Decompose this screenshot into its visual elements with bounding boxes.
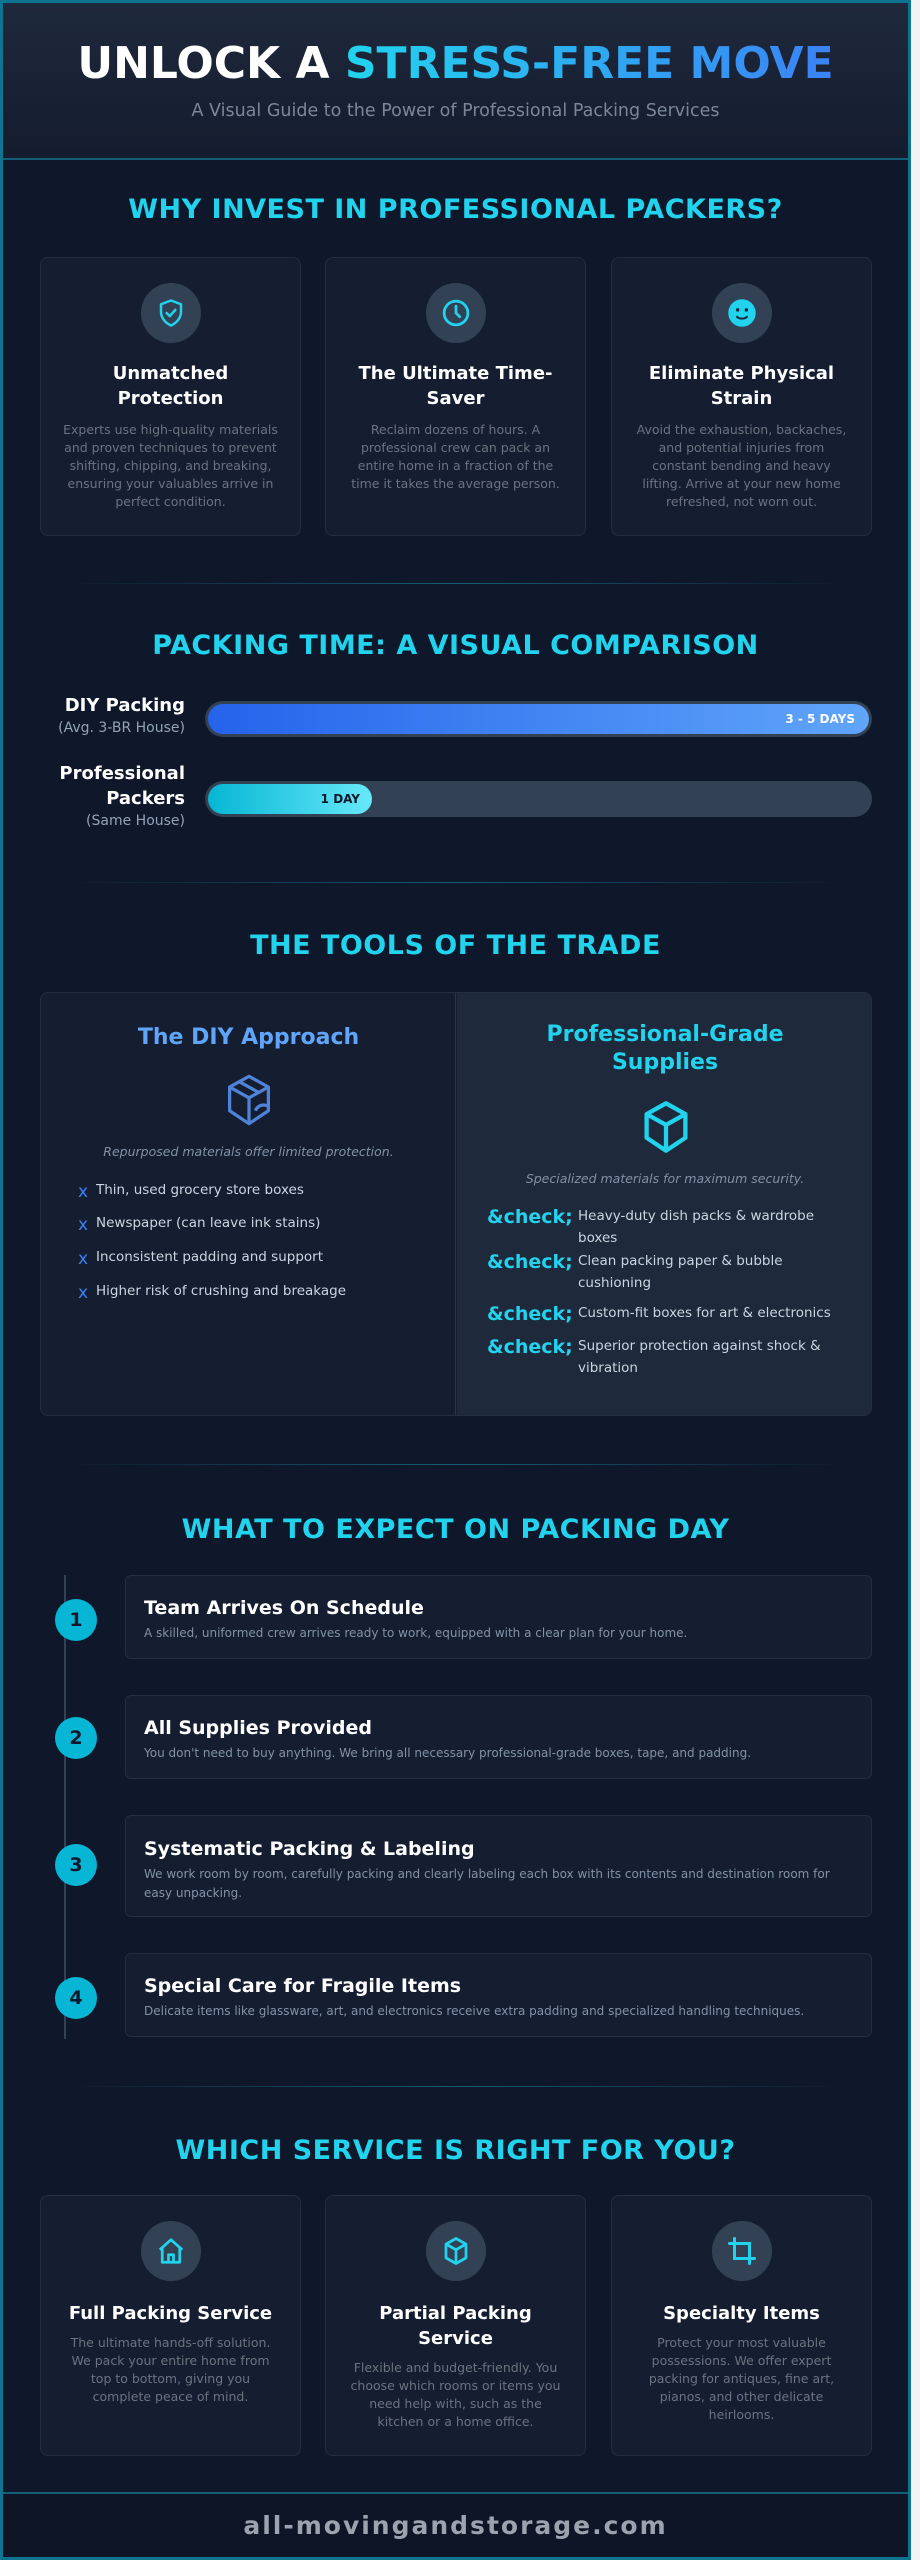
bar: professional (205, 781, 872, 817)
card: partial packing: Partial Packing Service (379, 2303, 532, 2349)
panel: DIY approach: Repurposed materials offer limited protection. (103, 1144, 394, 1159)
panel: DIY approach (41, 993, 456, 1417)
panel: professional supplies: &check; (487, 1206, 573, 1228)
bar: DIY (205, 701, 872, 737)
panel: professional supplies: Superior protection against shock & vibration (578, 1338, 821, 1376)
card: protection (40, 257, 301, 536)
panel: professional supplies: Clean packing paper & bubble cushioning (578, 1253, 783, 1291)
label: DIY (58, 695, 185, 736)
panel: professional supplies: Specialized materials for maximum security. (526, 1171, 804, 1186)
card: full packing (40, 2195, 301, 2456)
panel: professional supplies: Custom-fit boxes for art & electronics (578, 1305, 831, 1321)
icon: crop frame (712, 2221, 772, 2281)
timeline (64, 1575, 66, 2039)
step 1 (55, 1575, 872, 1659)
panel: DIY approach: x (78, 1249, 88, 1269)
card: full packing: Full Packing Service (69, 2303, 272, 2324)
card: time saver (325, 257, 586, 536)
panel: professional supplies: Heavy-duty dish packs & wardrobe boxes (578, 1208, 814, 1246)
card: strain: Avoid the exhaustion, backaches, and potential injuries from constant bending and heavy lifting. Arrive at your new home refreshed, not worn out. (637, 422, 846, 509)
card: protection: Experts use high-quality materials and proven techniques to prevent shifting, chipping, and breaking, ensuring your valuables arrive in perfect condition. (63, 422, 278, 509)
title: UNLOCK A STRESS-FREE MOVE (77, 38, 834, 89)
card: strain: Eliminate Physical Strain (649, 363, 834, 409)
panel: DIY approach: The DIY Approach (138, 1025, 359, 1050)
panel: DIY approach: x (78, 1283, 88, 1303)
panel: professional supplies: Professional-Grade (546, 1022, 784, 1047)
panel: professional supplies: &check; (487, 1251, 573, 1273)
card: time saver: Reclaim dozens of hours. A professional crew can pack an entire home in a fraction of the time it takes the average person. (351, 422, 560, 491)
icon: clock (426, 283, 486, 343)
step 1: A skilled, uniformed crew arrives ready to work, equipped with a clear plan for your home. (144, 1626, 687, 1640)
card: specialty: Protect your most valuable possessions. We offer expert packing for antiques, fine art, pianos, and other delicate heirlooms. (649, 2335, 834, 2422)
step 4: Special Care for Fragile Items (144, 1975, 461, 1997)
panel: tools comparison (40, 992, 872, 1416)
step 3: We work room by room, carefully packing and clearly labeling each box with its contents and destination room for easy unpacking. (144, 1867, 830, 1900)
panel: professional supplies: Supplies (612, 1050, 718, 1075)
heading: which service: WHICH SERVICE IS RIGHT FOR YOU? (175, 2135, 736, 2166)
icon: box (228, 1074, 270, 1126)
bar chart: packing time (58, 695, 872, 829)
panel: professional supplies: &check; (487, 1336, 573, 1358)
step 4 (55, 1953, 872, 2037)
step 1: 1 (69, 1609, 83, 1631)
step 3 (55, 1815, 872, 1917)
panel: DIY approach: Inconsistent padding and support (96, 1249, 323, 1265)
bar: professional: 1 DAY (321, 792, 360, 806)
card: protection: Unmatched Protection (113, 363, 228, 409)
heading: packing day: WHAT TO EXPECT ON PACKING DAY (182, 1514, 729, 1545)
step 2: 2 (69, 1727, 83, 1749)
step 3: Systematic Packing & Labeling (144, 1838, 475, 1860)
card: partial packing (325, 2195, 586, 2456)
label: professional: Professional Packers (59, 763, 185, 809)
step 2: All Supplies Provided (144, 1717, 372, 1739)
step 3: 3 (69, 1854, 83, 1876)
heading: tools: THE TOOLS OF THE TRADE (250, 930, 661, 961)
heading: packing time: PACKING TIME: A VISUAL COMPARISON (152, 630, 759, 661)
panel: professional supplies (457, 993, 873, 1417)
panel: DIY approach: Thin, used grocery store boxes (96, 1182, 304, 1198)
step 1: Team Arrives On Schedule (144, 1597, 424, 1619)
step 4: 4 (69, 1987, 83, 2009)
card: specialty: Specialty Items (663, 2303, 820, 2324)
label: DIY: (Avg. 3-BR House) (58, 720, 185, 736)
card: strain (611, 257, 872, 536)
panel: professional supplies: &check; (487, 1303, 573, 1325)
icon: smile (712, 283, 772, 343)
label: professional: (Same House) (86, 813, 185, 829)
footer: all-movingandstorage.com (243, 2511, 668, 2540)
label: professional (59, 763, 185, 829)
card: partial packing: Flexible and budget-friendly. You choose which rooms or items you need help with, such as the kitchen or a home office. (351, 2360, 560, 2429)
step 2 (55, 1695, 872, 1779)
panel: DIY approach: x (78, 1182, 88, 1202)
card: specialty (611, 2195, 872, 2456)
label: DIY: DIY Packing (65, 695, 185, 716)
step 4: Delicate items like glassware, art, and electronics receive extra padding and specialized handling techniques. (144, 2004, 804, 2018)
icon: shield (140, 283, 200, 343)
card: time saver: The Ultimate Time-Saver (358, 363, 552, 409)
icon: cube (644, 1101, 688, 1153)
header (3, 3, 908, 160)
heading: why invest: WHY INVEST IN PROFESSIONAL PACKERS? (128, 194, 783, 225)
panel: DIY approach: Higher risk of crushing and breakage (96, 1283, 346, 1299)
card: full packing: The ultimate hands-off solution. We pack your entire home from top to bottom, giving you complete peace of mind. (71, 2335, 270, 2404)
footer (3, 2492, 908, 2560)
panel: DIY approach: Newspaper (can leave ink stains) (96, 1215, 320, 1231)
subtitle: A Visual Guide to the Power of Professional Packing Services (191, 101, 720, 121)
panel: DIY approach: x (78, 1215, 88, 1235)
step 2: You don't need to buy anything. We bring all necessary professional-grade boxes, tape, and padding. (144, 1746, 751, 1760)
icon: house (140, 2221, 200, 2281)
icon: box (426, 2221, 486, 2281)
bar: DIY: 3 - 5 DAYS (785, 712, 855, 726)
